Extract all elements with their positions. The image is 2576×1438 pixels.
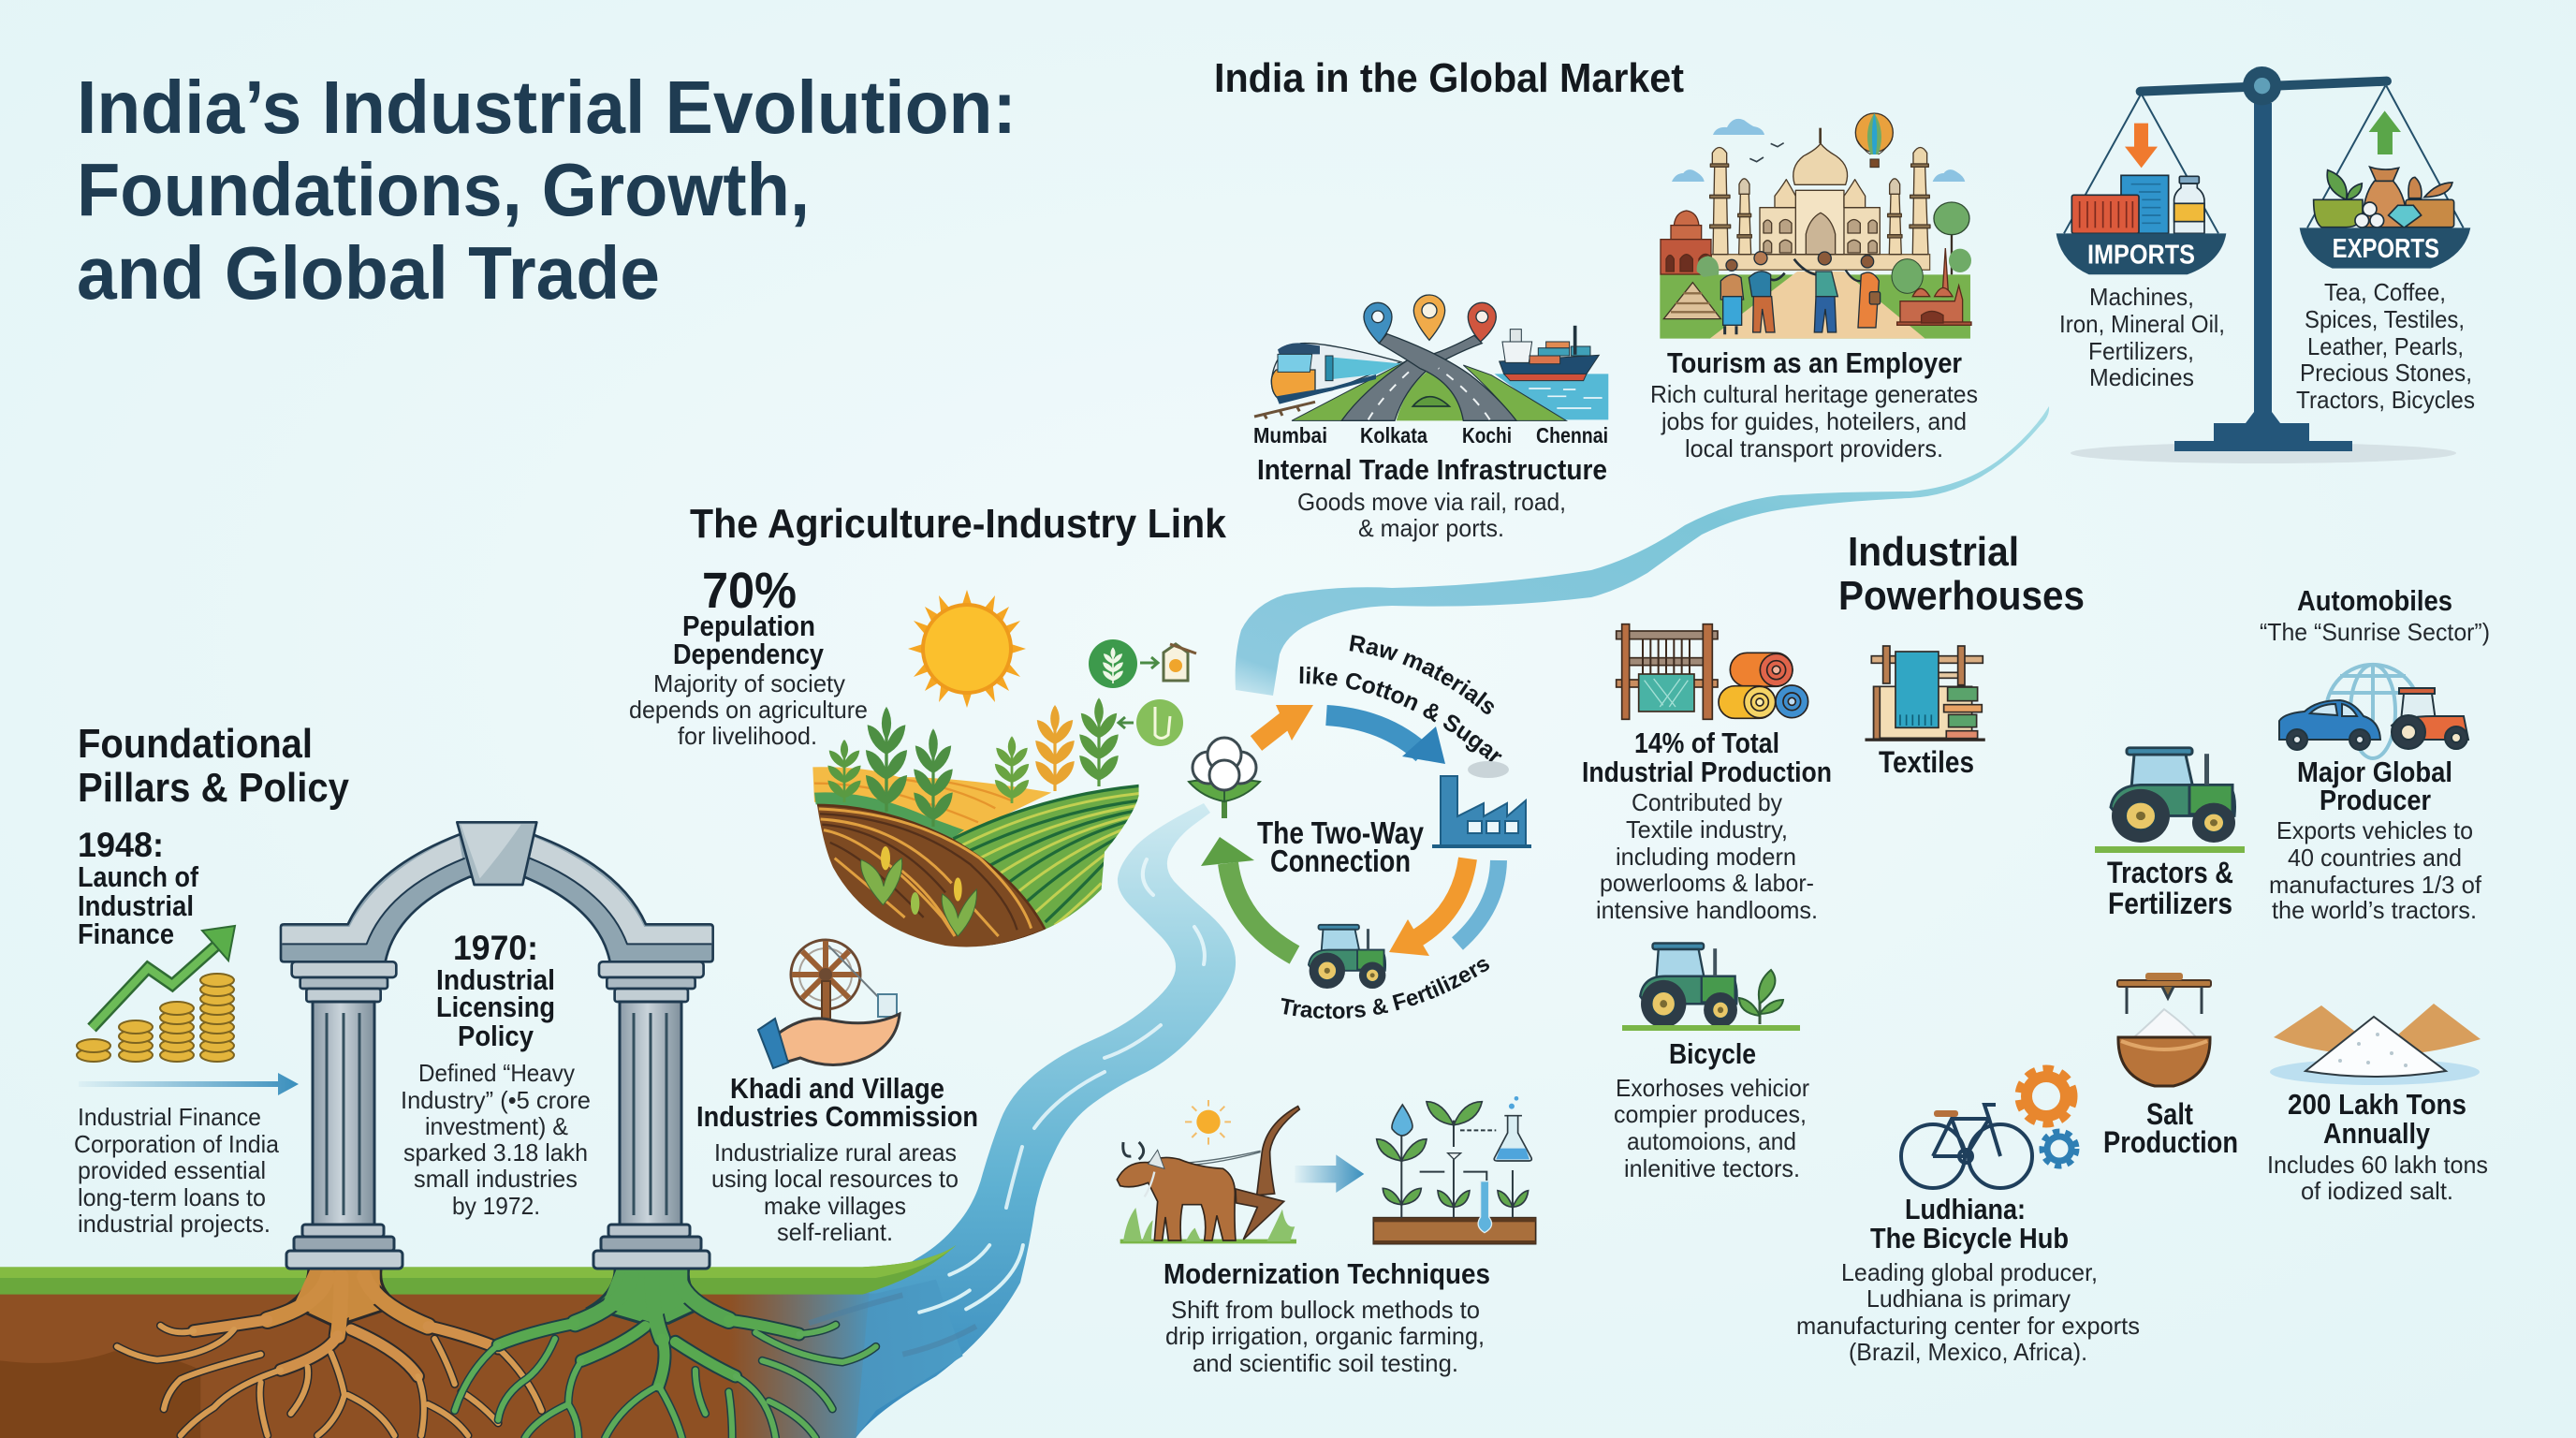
text: raw materials curved: like Cotton & Sugar (1299, 667, 1502, 762)
heading: foundational pillars (78, 721, 349, 811)
train (1254, 343, 1401, 418)
illustration: farm hemisphere (812, 697, 1140, 949)
arrow: orange to raw materials (1256, 705, 1313, 743)
grass and path (1660, 274, 1970, 339)
text block: 70% dependency: Pepulation (682, 609, 815, 642)
text block: 1948 launch: 1948: (78, 826, 164, 864)
brown furrowed field (812, 805, 1046, 949)
text block: modernization techniques: Modernization Techniques (1164, 1257, 1490, 1290)
roads (1341, 335, 1482, 420)
arrow: bullock to modern (1295, 1154, 1364, 1193)
text block: 1970 licensing policy: 1970: (453, 929, 538, 967)
green band (814, 792, 964, 839)
heading: industrial powerhouses (1838, 529, 2085, 619)
text block: 1970 licensing policy: investment) & (425, 1112, 568, 1140)
text: raw materials curved: Raw materials (1350, 635, 1494, 714)
text block: IFC description: provided essential (78, 1156, 266, 1184)
text block: 14% of total: Contributed by (1632, 788, 1782, 816)
red hall (1661, 211, 1711, 274)
arrow: green tractor to cotton (1201, 837, 1295, 955)
text block: 200 lakh tons: Includes 60 lakh tons (2267, 1151, 2488, 1179)
import goods (2071, 175, 2204, 233)
water highlights (919, 1245, 1023, 1313)
text block: internal trade infrastructure: Internal Trade Infrastructure (1257, 453, 1607, 486)
beam (2141, 66, 2387, 105)
heading: agriculture-industry link: The Agriculture-Industry Link (690, 501, 1226, 547)
text block: automobiles heading: “The “Sunrise Sector”) (2260, 618, 2490, 646)
text block: imports list: Medicines (2089, 363, 2194, 391)
text: tractors and fertilizers curved: Tractors & Fertilizers (1281, 959, 1490, 1019)
text block: 200 lakh tons (2267, 1088, 2488, 1205)
title: Foundations, Growth, (77, 148, 810, 231)
icon: textile loom (1866, 646, 1984, 741)
arrow: orange factory to tractor (1389, 858, 1468, 956)
labels: port cities: Chennai (1536, 423, 1608, 448)
pan: imports (2056, 233, 2226, 274)
fade into river (729, 1280, 963, 1438)
icon: factory (1432, 761, 1531, 848)
icon: growth arrow and coin stacks (77, 926, 235, 1062)
text block: Ludhiana: Ludhiana is primary (1866, 1284, 2071, 1313)
arch with capitals (281, 822, 713, 1002)
arrow: exports up (2369, 110, 2401, 154)
icon: salt bowl (2117, 973, 2211, 1086)
arrow: finance to pillar (79, 1073, 299, 1095)
labels: port cities: Kolkata (1360, 423, 1427, 448)
two-way connection cycle (1187, 635, 1531, 1019)
text block: 14% of total (1582, 726, 1832, 924)
text block: IFC description: Industrial Finance (78, 1103, 261, 1131)
fabric rolls (1719, 653, 1808, 718)
text block: Khadi commission: Industries Commission (696, 1100, 978, 1133)
icon: cotton boll (1189, 738, 1260, 818)
icon: wheat to factory flow (1089, 639, 1196, 688)
text block: 1970 licensing policy: Policy (458, 1020, 534, 1052)
text block: modernization techniques (1164, 1257, 1490, 1377)
grass strip (0, 1245, 956, 1295)
pan: exports (2300, 227, 2470, 269)
icon: sun (908, 590, 1026, 708)
pillar arch (281, 822, 713, 1269)
pyramid (1663, 283, 1720, 319)
text block: exports list: Spices, Testiles, (2305, 305, 2465, 333)
text block: Khadi commission: self-reliant. (777, 1218, 893, 1246)
text block: 200 lakh tons: Annually (2323, 1117, 2431, 1150)
gear blue (2042, 1132, 2076, 1166)
ground with soil and grass strip (0, 1245, 1023, 1438)
text block: 70% dependency: Dependency (673, 638, 825, 670)
icon: bicycle and gears (1901, 1069, 2076, 1188)
text block: bicycle: compier produces, (1614, 1100, 1807, 1128)
text block: 14% of total: including modern (1616, 843, 1796, 871)
text block: major global producer: Producer (2320, 784, 2431, 816)
text block: major global producer: 40 countries and (2288, 844, 2462, 872)
labels: port cities (1253, 423, 1608, 448)
red temple (1897, 248, 1971, 325)
text block: 70% dependency (629, 563, 868, 750)
text block: 1970 licensing policy: Defined “Heavy (418, 1059, 575, 1087)
balance scale (2056, 66, 2470, 463)
river: main lower course (805, 803, 1236, 1438)
text block: automobiles heading (2260, 584, 2490, 646)
icon: tractor small (1309, 925, 1385, 989)
text block: 14% of total: 14% of Total (1634, 726, 1779, 759)
green striped field (953, 785, 1140, 943)
icon: globe with car and tractor (2279, 665, 2468, 758)
text block: 1970 licensing policy: sparked 3.18 lakh (403, 1138, 588, 1167)
text block: IFC description: Corporation of India (74, 1130, 280, 1158)
roots: green (455, 1269, 876, 1438)
yellow fields (812, 767, 1051, 840)
text block: major global producer: manufactures 1/3 of (2269, 871, 2482, 899)
illustration: Taj Mahal tourism scene (1660, 113, 1971, 339)
text block: 1948 launch: Industrial (78, 889, 194, 922)
text block: major global producer: the world’s tractors. (2272, 896, 2477, 924)
export goods (2314, 167, 2454, 227)
labels: port cities: Mumbai (1253, 423, 1327, 448)
text block: major global producer: Major Global (2297, 756, 2452, 788)
left column (286, 1002, 402, 1269)
text block: imports list: Machines, (2089, 283, 2194, 311)
text block: 14% of total: intensive handlooms. (1596, 896, 1818, 924)
text block: 1970 licensing policy: by 1972. (452, 1192, 540, 1220)
text block: 70% dependency: for livelihood. (678, 722, 817, 750)
text block: exports list: Leather, Pearls, (2307, 332, 2464, 360)
text block: tourism as an employer: local transport providers. (1685, 434, 1943, 462)
label: tractors and fertilizers (2107, 856, 2233, 920)
text block: Khadi commission (696, 1072, 978, 1246)
illustration: rail, road, and ports (1254, 295, 1608, 420)
text block: 1970 licensing policy (401, 929, 591, 1220)
label: salt production (2103, 1097, 2238, 1159)
pan: imports: IMPORTS (2087, 241, 2195, 271)
text block: bicycle (1614, 1037, 1809, 1182)
icon: salt mounds (2270, 1004, 2481, 1085)
text block: bicycle: Bicycle (1669, 1037, 1756, 1070)
text block: tourism as an employer: jobs for guides, hoteilers, and (1661, 407, 1967, 435)
text: the two-way connection: The Two-Way (1257, 815, 1425, 850)
text block: 70% dependency: 70% (702, 563, 797, 619)
illustration: ox and plough (1117, 1100, 1299, 1241)
text block: Khadi commission: Khadi and Village (730, 1072, 944, 1105)
right column (593, 1002, 710, 1269)
heading: foundational pillars: Foundational (78, 721, 313, 767)
ship (1500, 326, 1599, 381)
river: upper course to global market (1236, 406, 2049, 696)
label: tractors and fertilizers: Fertilizers (2108, 887, 2232, 920)
text block: bicycle: Exorhoses vehicior (1616, 1074, 1809, 1102)
illustration: modern farming (1373, 1096, 1536, 1244)
balloon (1855, 113, 1893, 152)
text block: IFC description: long-term loans to (78, 1183, 266, 1211)
tourists (1720, 252, 1881, 334)
minarets (1713, 167, 1728, 255)
building (1711, 255, 1930, 270)
text block: Ludhiana: manufacturing center for exports (1796, 1312, 2140, 1340)
text block: 14% of total: Textile industry, (1626, 815, 1788, 844)
sea (1495, 374, 1608, 419)
text block: exports list (2296, 278, 2475, 414)
text: the two-way connection: Connection (1270, 844, 1411, 878)
text block: exports list: Tea, Coffee, (2324, 278, 2446, 306)
text block: imports list (2059, 283, 2225, 391)
text block: major global producer: Exports vehicles to (2276, 816, 2473, 844)
pan: exports: EXPORTS (2333, 234, 2439, 264)
text block: 70% dependency: depends on agriculture (629, 696, 868, 724)
text block: exports list: Precious Stones, (2300, 359, 2472, 387)
text: the two-way connection (1257, 815, 1425, 878)
text block: tourism as an employer: Tourism as an Employer (1667, 346, 1962, 379)
heading: India in the global market: India in the Global Market (1214, 55, 1684, 101)
title (77, 66, 1017, 315)
text block: imports list: Fertilizers, (2088, 337, 2194, 365)
icon: spinning wheel in hand (758, 940, 900, 1068)
gear orange (2019, 1069, 2073, 1123)
text block: 1970 licensing policy: small industries (414, 1165, 578, 1193)
text block: 1970 licensing policy: Industry” (•5 crore (401, 1086, 591, 1114)
green ground (1292, 360, 1407, 420)
icon: tractor with seedling (1622, 943, 1800, 1031)
car (2279, 700, 2380, 750)
text block: modernization techniques: Shift from bullock methods to (1171, 1296, 1480, 1324)
text block: bicycle: inlenitive tectors. (1624, 1154, 1800, 1182)
text block: Khadi commission: using local resources to (711, 1165, 959, 1193)
text block: Ludhiana: (Brazil, Mexico, Africa). (1849, 1338, 2087, 1366)
text block: tourism as an employer: Rich cultural heritage generates (1650, 380, 1978, 408)
text block: modernization techniques: drip irrigation, organic farming, (1165, 1322, 1485, 1350)
crop plants (827, 697, 1119, 827)
title: and Global Trade (77, 231, 660, 315)
text block: 200 lakh tons: of iodized salt. (2301, 1177, 2453, 1205)
roots: orange (117, 1269, 542, 1435)
text block: Ludhiana: The Bicycle Hub (1870, 1222, 2069, 1255)
arrow: blue raw materials to factory (1326, 715, 1445, 764)
strings (2064, 86, 2464, 233)
text block: 1948 launch: Launch of (78, 860, 199, 893)
text block: Ludhiana: Leading global producer, (1841, 1258, 2098, 1286)
label: textiles: Textiles (1879, 745, 1974, 779)
text block: modernization techniques: and scientific soil testing. (1193, 1349, 1458, 1377)
text block: bicycle: automoions, and (1627, 1127, 1796, 1155)
text block: Khadi commission: make villages (764, 1192, 906, 1220)
red tractor (2392, 688, 2468, 749)
text block: Ludhiana: Ludhiana: (1905, 1193, 2026, 1225)
text block: internal trade infrastructure (1257, 453, 1607, 542)
label: salt production: Production (2103, 1125, 2238, 1159)
text block: IFC description: industrial projects. (78, 1210, 271, 1238)
text block: Khadi commission: Industrialize rural areas (714, 1138, 957, 1167)
text block: major global producer (2269, 756, 2482, 924)
title: India’s Industrial Evolution: (77, 66, 1017, 149)
label: salt production: Salt (2146, 1097, 2193, 1131)
text block: 200 lakh tons: 200 Lakh Tons (2288, 1088, 2466, 1121)
text block: imports list: Iron, Mineral Oil, (2059, 310, 2225, 338)
text block: 1970 licensing policy: Industrial (436, 963, 555, 996)
text block: 1970 licensing policy: Licensing (436, 990, 555, 1023)
text block: exports list: Tractors, Bicycles (2296, 386, 2475, 414)
label: tractors and fertilizers: Tractors & (2107, 856, 2233, 889)
arrow: light blue return (1457, 860, 1499, 944)
icon: loom with fabric rolls (1617, 624, 1808, 719)
text block: 14% of total: Industrial Production (1582, 756, 1832, 788)
corn plants (861, 846, 976, 936)
text block: 70% dependency: Majority of society (653, 669, 845, 697)
text block: 14% of total: powerlooms & labor- (1600, 869, 1814, 897)
text block: 1948 launch: Finance (78, 917, 174, 950)
text block: 1948 launch (78, 826, 199, 950)
heading: industrial powerhouses: Powerhouses (1838, 573, 2085, 619)
trees (1948, 234, 1954, 274)
text block: automobiles heading: Automobiles (2297, 584, 2452, 617)
icon: large tractor (2095, 748, 2245, 853)
arrow: imports down (2125, 124, 2158, 168)
text block: tourism as an employer (1650, 346, 1978, 462)
icon: soil test flow (1119, 699, 1183, 746)
labels: port cities: Kochi (1462, 423, 1512, 448)
text block: internal trade infrastructure: Goods move via rail, road, (1297, 488, 1566, 516)
heading: foundational pillars: Pillars & Policy (78, 765, 349, 811)
heading: industrial powerhouses: Industrial (1848, 529, 2019, 575)
text block: IFC description (74, 1103, 280, 1238)
text block: internal trade infrastructure: & major ports. (1358, 514, 1504, 542)
text block: Ludhiana (1796, 1193, 2140, 1366)
location pins (1364, 295, 1496, 344)
